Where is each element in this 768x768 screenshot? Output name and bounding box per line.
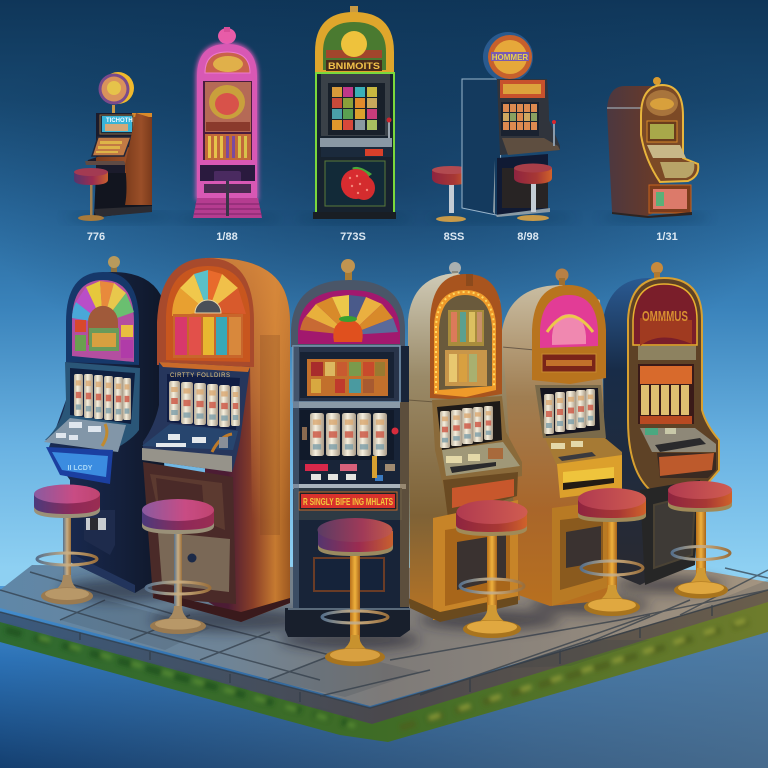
top row: pink machine: [193, 27, 262, 218]
labels row: 8SS: [444, 231, 464, 243]
labels row: 8/98: [517, 231, 539, 243]
cabinet door: [143, 462, 236, 604]
grass: [0, 596, 768, 742]
machine 5: [502, 268, 622, 606]
machine 6: [603, 262, 719, 585]
stool 6: [668, 481, 732, 598]
labels row: 1/88: [216, 231, 238, 243]
top row: machine 1: TICHOTH: [106, 118, 133, 124]
top row: stool 8SS: [432, 166, 470, 222]
stool 4: [456, 500, 528, 638]
machine 2: [142, 258, 290, 622]
machine 2: CIRTTY FOLLDIRS: [170, 373, 230, 379]
top row: cabinet with round sign: [462, 32, 560, 217]
prize wheel: [300, 295, 398, 335]
top row: stool: [74, 168, 108, 221]
marquee: [299, 492, 397, 510]
top row: green machine: BNIMOITS: [328, 61, 380, 72]
labels row: 776: [87, 231, 105, 243]
machine 6: OMMMUS: [642, 308, 688, 325]
machine 1: [44, 256, 165, 593]
round sign: [98, 72, 134, 114]
top row shadows: [65, 213, 710, 223]
labels row: 773S: [340, 231, 366, 243]
machine 1: II LCDY: [68, 465, 93, 472]
machine 3: [285, 259, 410, 637]
machine shadows: [60, 577, 725, 650]
top row: green machine: [313, 6, 396, 219]
round sign: HOMMER: [492, 53, 528, 62]
top row: machine 1: [85, 72, 152, 217]
rainbow wheel: [72, 281, 134, 323]
round sign: [483, 32, 533, 82]
top row: stool 8/98: [514, 164, 552, 221]
top row: wooden machine: [607, 77, 698, 218]
stool 2: [142, 499, 214, 634]
labels row: 1/31: [656, 231, 678, 243]
stone platform with grass edge: [0, 565, 768, 742]
labels row: [87, 231, 678, 243]
stool 1: [34, 484, 100, 604]
strawberry icon: [341, 167, 375, 200]
stool 5: [578, 488, 646, 616]
sunburst: [172, 270, 246, 316]
marquee: R SINGLY BIFE ING MHLATS: [303, 497, 393, 508]
machine 4: [408, 262, 522, 622]
stool 3: [318, 518, 393, 666]
